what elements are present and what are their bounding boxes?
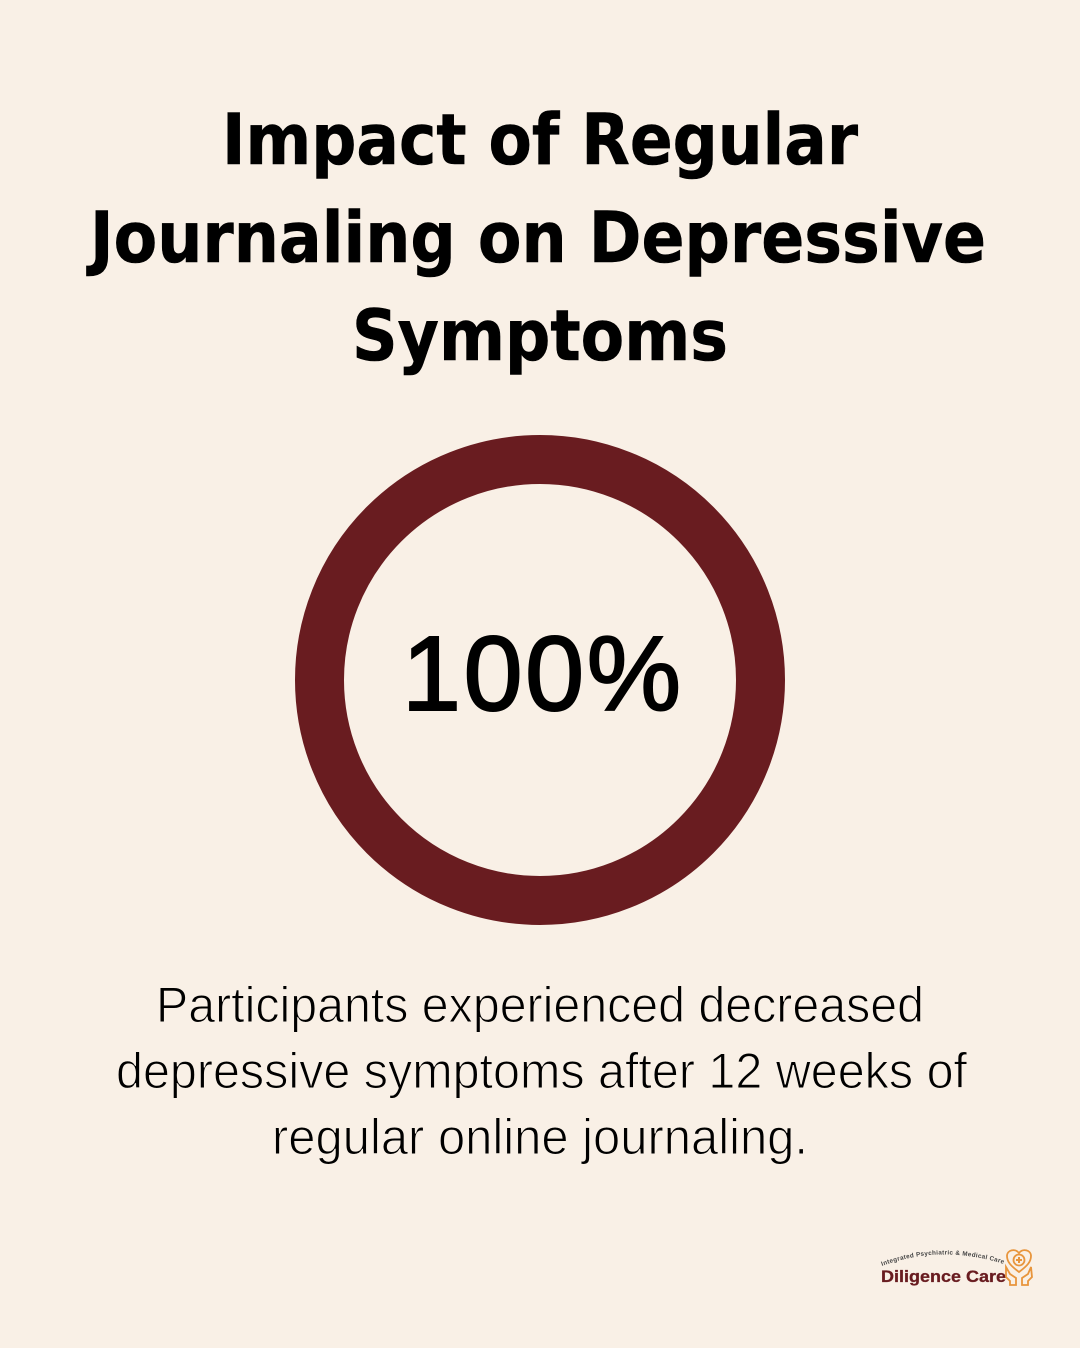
title: Impact of Regular — [222, 99, 858, 181]
logo name: Diligence Care — [881, 1267, 1006, 1286]
title: Journaling on Depressive — [86, 197, 986, 279]
ring — [320, 460, 760, 900]
description text: Participants experienced decreased — [156, 977, 924, 1033]
description text: regular online journaling. — [272, 1109, 808, 1165]
ring chart: 100 percent — [320, 460, 760, 900]
description text — [116, 977, 967, 1165]
title — [86, 99, 986, 377]
logo: Diligence Care — [880, 1249, 1033, 1286]
ring value: 100% — [402, 615, 681, 733]
description text: depressive symptoms after 12 weeks of — [116, 1043, 967, 1099]
logo icon: heart and hands — [1006, 1250, 1032, 1285]
logo tagline — [882, 1254, 1004, 1266]
title: Symptoms — [352, 295, 728, 377]
logo: Diligence Care: Integrated Psychiatric & Medical Care — [880, 1250, 1004, 1266]
